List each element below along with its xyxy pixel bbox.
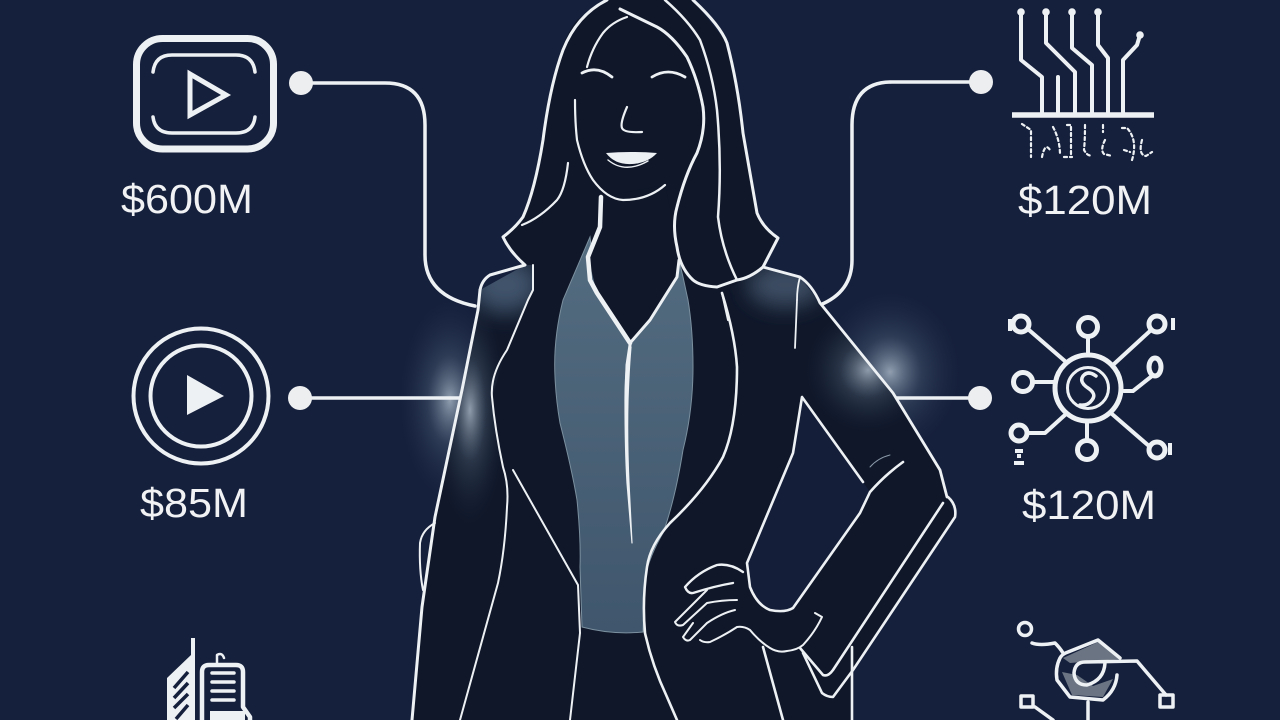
icon: buildings bbox=[167, 638, 250, 720]
floor lines bbox=[212, 673, 234, 700]
blouse bbox=[555, 237, 693, 633]
hair outline bbox=[480, 0, 778, 290]
connector: top left bbox=[289, 71, 475, 306]
collar bbox=[588, 197, 679, 543]
mouth bbox=[606, 152, 657, 164]
woman figure bbox=[412, 0, 955, 720]
icon: connected eye bbox=[1018, 622, 1173, 720]
hand bbox=[675, 565, 822, 720]
left eyebrow bbox=[582, 70, 612, 77]
face bbox=[575, 17, 685, 200]
arm panel bbox=[747, 397, 870, 612]
right tower bbox=[202, 665, 250, 720]
jacket lines bbox=[412, 265, 947, 720]
left sleeve shading bbox=[448, 265, 532, 500]
figure silhouette bbox=[412, 0, 955, 720]
neck and collar shadow bbox=[588, 185, 679, 343]
label: $120M middle: $120M bbox=[1022, 482, 1156, 528]
connector: middle left bbox=[288, 386, 462, 410]
base bbox=[210, 711, 245, 720]
connector: top right bbox=[820, 70, 993, 305]
right eyebrow bbox=[652, 72, 685, 77]
label: $85M: $85M bbox=[140, 480, 248, 526]
label: $120M top: $120M bbox=[1018, 177, 1152, 223]
nose bbox=[622, 107, 642, 132]
icon: finance network bbox=[1010, 316, 1173, 463]
antenna hook bbox=[217, 654, 224, 664]
background glow: left bbox=[400, 300, 500, 500]
right shoulder shading bbox=[739, 268, 900, 418]
connector: middle right bbox=[893, 386, 992, 410]
icon: play button bbox=[134, 328, 268, 464]
right arm bbox=[747, 397, 955, 720]
lower lip bbox=[608, 160, 648, 167]
label: $600M: $600M bbox=[121, 176, 253, 222]
circuit glyph marks bbox=[1022, 124, 1152, 160]
icon: video frame bbox=[136, 38, 274, 149]
left tower bbox=[167, 638, 195, 720]
background glow: right bbox=[820, 292, 960, 452]
icon: circuit bbox=[1012, 8, 1154, 160]
jaw bbox=[575, 100, 665, 200]
